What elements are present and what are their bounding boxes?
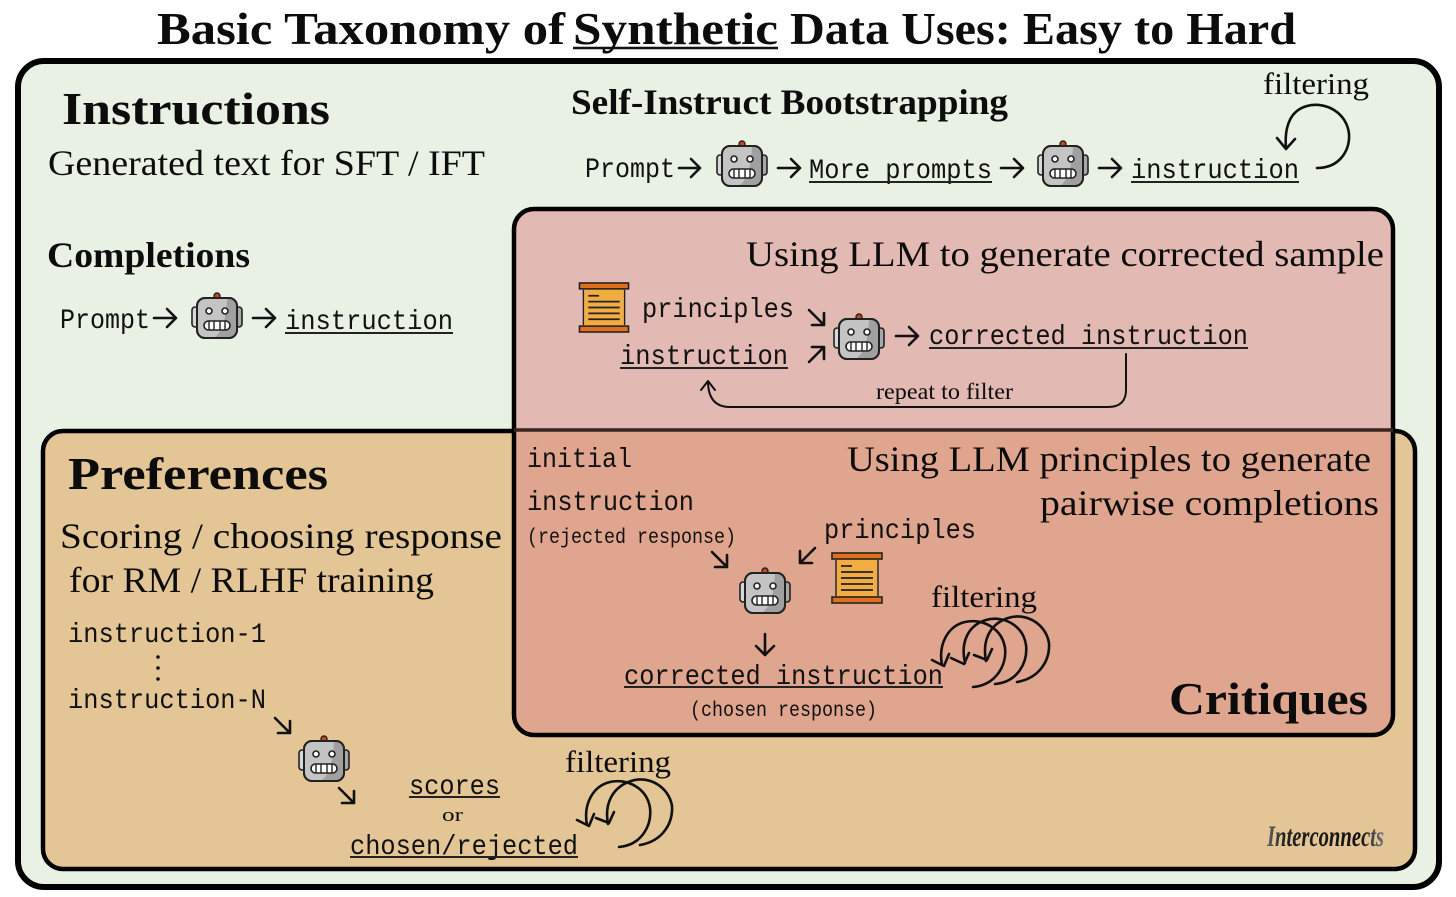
corrected sample heading: Using LLM to generate corrected sample xyxy=(746,234,1384,274)
title: Synthetic xyxy=(573,3,778,54)
preferences description: for RM / RLHF training xyxy=(69,560,434,600)
completions heading: Completions xyxy=(47,235,250,275)
initial instruction label: initial xyxy=(527,445,632,476)
repeat to filter arrow: repeat to filter xyxy=(876,379,1013,404)
instructions description: Generated text for SFT / IFT xyxy=(48,143,485,183)
preferences flow: instruction-1 xyxy=(68,620,266,651)
corrected sample flow xyxy=(579,283,1248,373)
self-instruct flow: instruction xyxy=(1131,156,1299,187)
completions flow xyxy=(60,293,453,338)
self-instruct flow: Prompt xyxy=(585,155,675,186)
title: Data Uses: Easy to Hard xyxy=(790,3,1296,54)
interconnects logo: Interconnects xyxy=(1266,820,1384,853)
corrected sample flow: principles xyxy=(642,295,794,326)
corrected sample flow: corrected instruction xyxy=(929,322,1248,353)
preferences flow: scores xyxy=(409,772,500,803)
preferences description xyxy=(60,516,502,600)
self-instruct flow: More prompts xyxy=(809,156,992,187)
filtering loops critiques: filtering xyxy=(931,579,1037,614)
completions flow: instruction xyxy=(285,307,453,338)
corrected sample flow: instruction xyxy=(620,342,788,373)
critiques heading: Critiques xyxy=(1169,673,1368,724)
filtering loops critiques xyxy=(931,579,1049,687)
filtering loop top xyxy=(1263,66,1369,168)
pairwise completions heading: pairwise completions xyxy=(1040,483,1379,523)
preferences flow: chosen/rejected xyxy=(350,832,578,863)
initial instruction label: instruction xyxy=(527,488,694,519)
filtering loop top: filtering xyxy=(1263,66,1369,101)
title: Basic Taxonomy of xyxy=(157,3,566,54)
preferences flow xyxy=(68,620,578,863)
instructions heading: Instructions xyxy=(62,83,330,134)
repeat to filter arrow xyxy=(701,354,1126,407)
preferences description: Scoring / choosing response xyxy=(60,516,502,556)
preferences heading: Preferences xyxy=(68,448,328,499)
critiques flow: corrected instruction xyxy=(624,662,943,693)
filtering loops preferences xyxy=(565,744,672,847)
preferences flow: or xyxy=(442,805,464,826)
critiques flow: principles xyxy=(824,516,976,547)
self-instruct flow xyxy=(585,141,1299,187)
pairwise completions heading: Using LLM principles to generate xyxy=(847,439,1371,479)
initial instruction label: (rejected response) xyxy=(527,527,736,550)
title xyxy=(157,3,1296,54)
critiques flow: (chosen response) xyxy=(690,700,877,723)
initial instruction label xyxy=(527,445,736,550)
completions flow: Prompt xyxy=(60,306,150,337)
panel: preferences xyxy=(43,431,1415,869)
preferences flow: instruction-N xyxy=(68,686,266,717)
filtering loops preferences: filtering xyxy=(565,744,671,779)
critiques flow xyxy=(624,516,976,723)
pairwise completions heading xyxy=(847,439,1379,523)
panel: critiques and corrected sample xyxy=(514,209,1393,735)
self-instruct bootstrapping heading: Self-Instruct Bootstrapping xyxy=(571,82,1008,122)
